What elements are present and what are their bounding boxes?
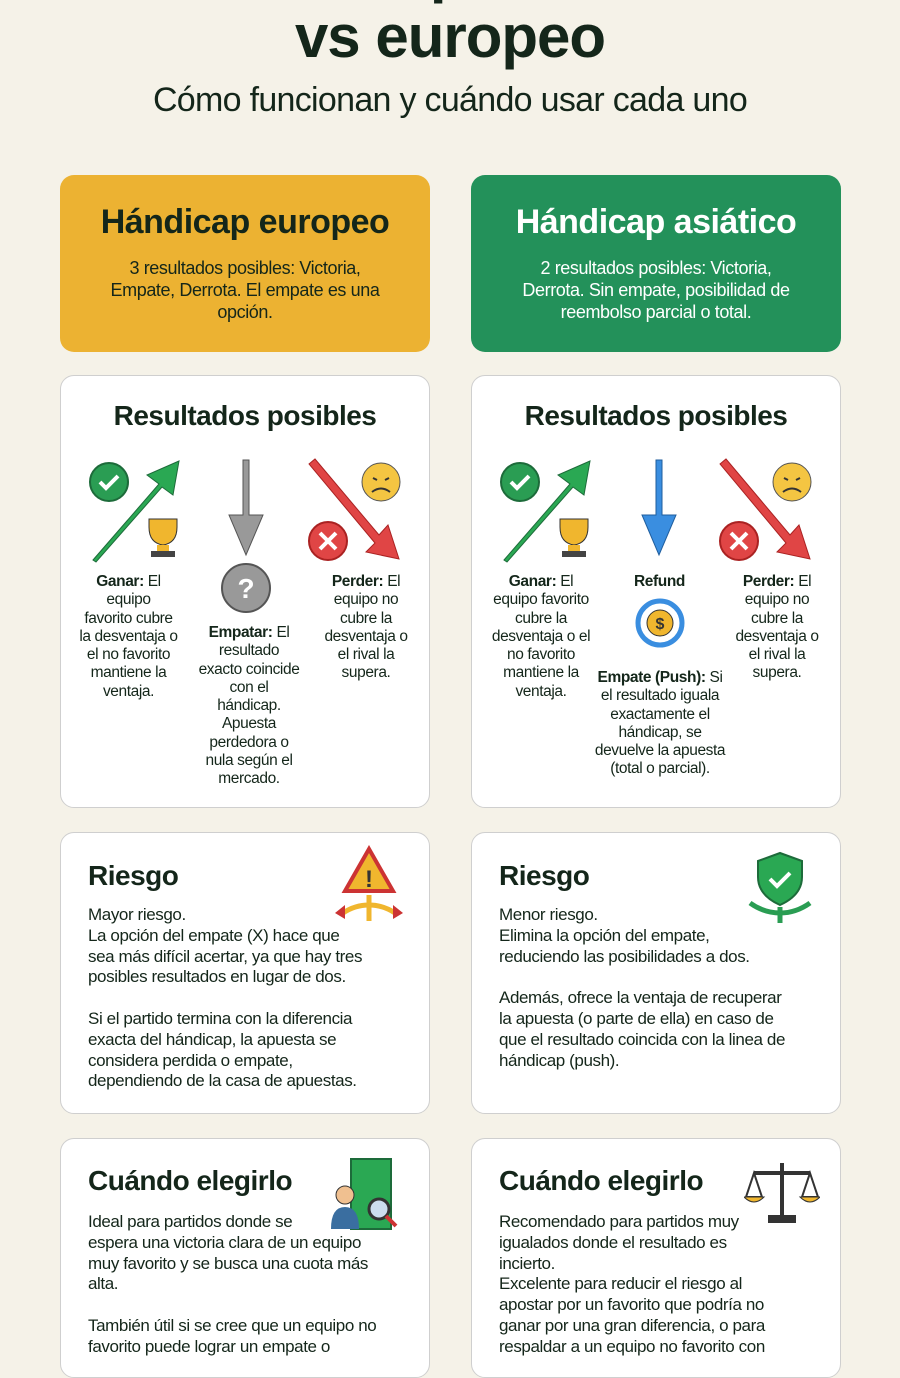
label: ganar: no favorito (507, 646, 575, 663)
panel: cuando asiatico: Excelente para reducir el riesgo al (499, 1274, 742, 1293)
label: perder: desventaja o (735, 628, 819, 645)
label: ganar: favorito cubre (84, 610, 173, 627)
panel: cuando europeo: También útil si se cree que un equipo no (88, 1316, 376, 1335)
label: perder: Perder: El (332, 573, 400, 590)
label: perder: cubre la (340, 610, 392, 627)
panel: cuando asiatico: igualados donde el resultado es (499, 1233, 727, 1252)
panel: cuando asiatico: ganar por una gran diferencia, o para (499, 1316, 765, 1335)
label: empate push: Empate (Push): Si (598, 669, 722, 686)
panel: riesgo asiatico: Menor riesgo. (499, 905, 598, 924)
card: europeo header: Empate, Derrota. El empate es una (111, 280, 379, 300)
card: europeo header: Hándicap europeo (101, 203, 389, 241)
card: asiatico header: reembolso parcial o total. (561, 302, 751, 322)
label: ganar: cubre la (515, 610, 567, 627)
label: ganar: ventaja. (103, 683, 154, 700)
label: ganar: mantiene la (503, 664, 579, 681)
label: ganar: Ganar: El (509, 573, 573, 590)
label: perder: supera. (342, 664, 390, 681)
panel: cuando asiatico: Recomendado para partidos muy (499, 1212, 739, 1231)
panel: resultados asiatico (471, 375, 841, 808)
label: ganar: Ganar: El (96, 573, 161, 590)
panel: riesgo asiatico: la apuesta (o parte de ella) en caso de (499, 1009, 774, 1028)
card: asiatico header: Derrota. Sin empate, posibilidad de (522, 280, 790, 300)
label: empatar: nula según el (205, 752, 292, 769)
label: empatar (199, 624, 300, 787)
label: empate push: el resultado iguala (601, 687, 719, 704)
label: ganar: la desventaja o (79, 628, 178, 645)
panel: riesgo europeo: posibles resultados en lugar de dos. (88, 967, 346, 986)
panel: cuando europeo (60, 1138, 430, 1378)
label: ganar: ventaja. (515, 683, 567, 700)
icons: asiatico outcomes: $ (656, 616, 665, 633)
label: perder (324, 573, 408, 681)
label: perder: cubre la (751, 610, 803, 627)
panel: riesgo europeo: La opción del empate (X) hace que (88, 926, 339, 945)
card: europeo header (60, 175, 430, 352)
panel: cuando asiatico: respaldar a un equipo no favorito con (499, 1337, 765, 1356)
panel: riesgo europeo: Mayor riesgo. (88, 905, 186, 924)
card: asiatico header: 2 resultados posibles: Victoria, (540, 258, 772, 278)
icon: warning: ! (365, 866, 373, 893)
label: ganar: equipo (106, 591, 151, 608)
label: ganar (79, 573, 178, 700)
icons: europeo outcomes (89, 458, 400, 613)
panel: cuando europeo: espera una victoria clara de un equipo (88, 1233, 361, 1252)
title: vs europeo (295, 3, 605, 70)
panel: cuando europeo: muy favorito y se busca una cuota más (88, 1254, 368, 1273)
panel: riesgo europeo: Riesgo (88, 860, 178, 891)
label: empatar: Empatar: El (209, 624, 289, 641)
label: empatar: Apuesta (222, 715, 276, 732)
label: perder: supera. (753, 664, 801, 681)
panel: riesgo asiatico: Riesgo (499, 860, 589, 891)
label: empate push: (total o parcial). (610, 760, 710, 777)
subtitle: Cómo funcionan y cuándo usar cada uno (153, 81, 747, 119)
label: ganar: equipo favorito (493, 591, 589, 608)
panel: cuando asiatico: Cuándo elegirlo (499, 1165, 703, 1196)
icon: warning (335, 845, 403, 921)
label: empate push: devuelve la apuesta (595, 742, 725, 759)
panel: resultados europeo (60, 375, 430, 808)
panel: riesgo asiatico: reduciendo las posibilidades a dos. (499, 947, 750, 966)
icons: europeo outcomes: ? (237, 573, 255, 604)
label: empatar: exacto coincide (199, 661, 299, 678)
label: empatar: resultado (219, 642, 279, 659)
label: empate push: hándicap, se (618, 724, 702, 741)
panel: cuando europeo: alta. (88, 1274, 118, 1293)
label: empate push (595, 669, 726, 777)
panel: riesgo asiatico: Además, ofrece la ventaja de recuperar (499, 988, 781, 1007)
card: asiatico header: Hándicap asiático (516, 203, 796, 241)
label: perder: desventaja o (324, 628, 408, 645)
label: perder: Perder: El (743, 573, 811, 590)
panel: cuando asiatico: incierto. (499, 1254, 555, 1273)
icon: analyst (331, 1158, 398, 1230)
panel: riesgo europeo: sea más difícil acertar, ya que hay tres (88, 947, 362, 966)
label: empate push: exactamente el (610, 706, 710, 723)
label: perder: equipo no (745, 591, 809, 608)
icons: asiatico outcomes (500, 458, 812, 648)
icon: shield (748, 852, 812, 923)
card: asiatico header (471, 175, 841, 352)
label: perder (735, 573, 819, 681)
label: ganar: desventaja o el (492, 628, 590, 645)
panel: riesgo europeo: dependiendo de la casa de apuestas. (88, 1071, 357, 1090)
panel: riesgo europeo: exacta del hándicap, la apuesta se (88, 1030, 336, 1049)
card: europeo header: 3 resultados posibles: Victoria, (130, 258, 360, 278)
panel: cuando europeo: favorito puede lograr un empate o (88, 1337, 330, 1356)
label: perder: el rival la (749, 646, 805, 663)
label: perder: el rival la (338, 646, 394, 663)
label: ganar: el no favorito (87, 646, 170, 663)
title (203, 0, 697, 70)
panel: riesgo asiatico: hándicap (push). (499, 1051, 619, 1070)
label: empatar: perdedora o (209, 734, 289, 751)
panel: cuando asiatico (471, 1138, 841, 1378)
panel: riesgo asiatico: Elimina la opción del empate, (499, 926, 709, 945)
label: empatar: con el (230, 679, 268, 696)
panel: riesgo asiatico (471, 832, 841, 1114)
panel: resultados asiatico: Resultados posibles (525, 400, 787, 431)
panel: cuando europeo: Cuándo elegirlo (88, 1165, 292, 1196)
label: ganar: mantiene la (91, 664, 166, 681)
panel: riesgo europeo: Si el partido termina con la diferencia (88, 1009, 352, 1028)
panel: resultados europeo: Resultados posibles (114, 400, 376, 431)
panel: riesgo europeo: considera perdida o empate, (88, 1051, 293, 1070)
panel: riesgo europeo (60, 832, 430, 1114)
label: perder: equipo no (334, 591, 398, 608)
label: empatar: hándicap. (217, 697, 281, 714)
panel: cuando europeo: Ideal para partidos donde se (88, 1212, 292, 1231)
label: refund: Refund (634, 573, 685, 590)
label: ganar (492, 573, 590, 700)
panel: cuando asiatico: apostar por un favorito que podría no (499, 1295, 764, 1314)
panel: riesgo asiatico: que el resultado coincida con la linea de (499, 1030, 785, 1049)
icon: scale (744, 1163, 820, 1223)
card: europeo header: opción. (217, 302, 273, 322)
label: empatar: mercado. (218, 770, 280, 787)
